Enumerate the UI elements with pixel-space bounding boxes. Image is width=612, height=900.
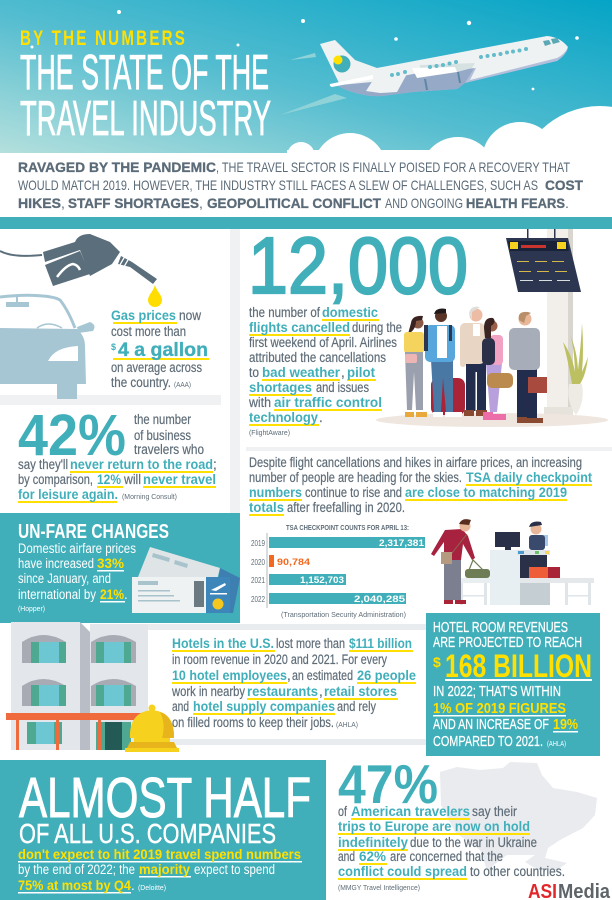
bar chart: TSA checkpoint counts: 2,040,285 xyxy=(354,594,405,604)
illustration: hotel building and bell xyxy=(6,622,150,750)
bar chart: TSA checkpoint counts: 1,152,703 xyxy=(300,575,344,585)
header sky banner xyxy=(0,0,612,274)
plant xyxy=(563,323,588,415)
hotel text: on filled rooms to keep their jobs. xyxy=(172,715,334,730)
TSA intro text: after freefalling in 2020. xyxy=(287,500,405,515)
TSA intro text: totals xyxy=(249,500,284,515)
bar chart: TSA checkpoint counts: (Transportation Security Administration) xyxy=(281,612,406,619)
icon: car xyxy=(0,295,94,399)
panel: almost half of companies: 75% at most by Q4 xyxy=(18,878,131,893)
title: TRAVEL INDUSTRY xyxy=(20,92,271,146)
cancelled flights text: and issues xyxy=(316,380,369,395)
intro text: HIKES xyxy=(18,195,61,211)
icon: gas pump nozzle xyxy=(0,234,157,286)
bar chart: TSA checkpoint counts: 90,784 xyxy=(277,557,310,567)
gas prices text: 4 a gallon xyxy=(118,340,208,361)
illustration: travelers at departures board xyxy=(376,229,608,427)
bar chart: TSA checkpoint counts: 2019 xyxy=(251,539,265,548)
cancelled flights text: with xyxy=(248,395,271,410)
stat: 47 percent American travelers: to other countries. xyxy=(470,864,565,879)
un-fare body text: 21% xyxy=(100,587,124,602)
intro text: COST xyxy=(545,177,583,193)
stat: 42 percent business travelers: the number xyxy=(134,412,191,427)
cancelled flights text xyxy=(248,305,402,437)
intro text: , xyxy=(61,195,65,211)
cancelled flights text: air traffic control xyxy=(274,395,382,410)
cancelled flights text: to xyxy=(249,365,259,380)
bar chart: TSA checkpoint counts: 2020 xyxy=(251,558,265,567)
TSA intro text: continue to rise and xyxy=(305,485,402,500)
illustration: airplane xyxy=(280,36,568,115)
panel: almost half of companies: (Deloitte) xyxy=(138,885,166,892)
title xyxy=(20,46,271,146)
un-fare body text: . xyxy=(124,587,128,602)
panel: hotel room revenues: $ xyxy=(433,654,441,670)
un-fare body text: 33% xyxy=(97,556,124,571)
hotel text: $111 billion xyxy=(349,636,412,651)
stat: 42 percent business travelers: (Morning Consult) xyxy=(122,494,177,501)
stat: 12,000: 12,000 xyxy=(248,221,468,310)
TSA intro text xyxy=(249,455,592,516)
gas prices text: (AAA) xyxy=(174,382,191,389)
panel: almost half of companies: . xyxy=(131,878,135,893)
cancelled flights text: domestic xyxy=(322,305,378,320)
illustration: airport security checkpoint xyxy=(431,519,594,605)
stat: 47 percent American travelers: 47% xyxy=(338,753,438,815)
un-fare body text: international by xyxy=(18,587,96,602)
intro text: STAFF SHORTAGES xyxy=(68,195,199,211)
panel: almost half of companies xyxy=(0,760,326,900)
un-fare body text: have increased xyxy=(18,556,94,571)
person: man in gray blazer xyxy=(509,312,547,423)
hotel text: Hotels in the U.S. xyxy=(172,636,274,651)
panel: hotel room revenues: COMPARED TO 2021. xyxy=(433,733,543,750)
cancelled flights text: bad weather xyxy=(262,365,341,380)
person: woman in pink with backpack xyxy=(482,318,513,420)
hotel text: 26 people xyxy=(357,668,416,683)
stat: 42 percent business travelers xyxy=(18,403,217,503)
icon: service bell xyxy=(125,704,179,752)
gas prices text: $ xyxy=(111,342,116,352)
cancelled flights text: during the xyxy=(352,320,402,335)
hotel text: and xyxy=(172,699,189,714)
panel: hotel room revenues: 1% OF 2019 FIGURES xyxy=(433,700,566,717)
hotel text: in room revenue in 2020 and 2021. For every xyxy=(172,652,387,667)
intro text: GEOPOLITICAL CONFLICT xyxy=(207,195,381,211)
gas prices text xyxy=(111,308,209,390)
cancelled flights text: , xyxy=(341,365,345,380)
cancelled flights text: (FlightAware) xyxy=(249,430,290,437)
panel: almost half of companies: don't expect to hit 2019 travel spend numbers xyxy=(18,847,301,862)
un-fare body text: Domestic airfare prices xyxy=(18,541,136,556)
hotel text: retail stores xyxy=(324,684,397,699)
un-fare body text: since January, and xyxy=(18,571,111,586)
icon: plane tickets xyxy=(132,547,240,613)
hotel text: lost more than xyxy=(276,636,345,651)
TSA intro text: number of people are heading for the skies. xyxy=(249,470,462,485)
stat: 47 percent American travelers: indefinitely xyxy=(338,835,408,850)
person: man in blue jacket xyxy=(424,309,465,417)
stat: 42 percent business travelers: 42% xyxy=(18,403,126,468)
stat: 47 percent American travelers: 62% xyxy=(359,849,386,864)
TSA intro text: numbers xyxy=(249,485,302,500)
hotel text: an estimated xyxy=(292,668,353,683)
hotel text: hotel supply companies xyxy=(193,699,335,714)
title: THE STATE OF THE xyxy=(20,46,269,100)
cancelled flights text: the number of xyxy=(249,305,320,320)
stat: 42 percent business travelers: by comparison, xyxy=(18,472,93,487)
panel: almost half of companies: by the end of 2022; the xyxy=(18,862,135,877)
cancelled flights text: pilot xyxy=(347,365,375,380)
un-fare body text xyxy=(18,541,136,613)
stat: 42 percent business travelers: 12% xyxy=(97,472,121,487)
stat: 47 percent American travelers: say their xyxy=(472,804,517,819)
TSA intro text: TSA daily checkpoint xyxy=(466,470,592,485)
stat: 47 percent American travelers: are concerned that the xyxy=(390,849,503,864)
teal divider band xyxy=(0,217,612,229)
stat: 42 percent business travelers: of business xyxy=(134,428,191,443)
hotel text: restaurants xyxy=(247,684,318,699)
panel: hotel room revenues: AND AN INCREASE OF xyxy=(433,716,549,733)
stat: 47 percent American travelers: conflict could spread xyxy=(338,864,467,879)
hotel text: , xyxy=(287,668,291,683)
hotel text: , xyxy=(319,684,323,699)
cancelled flights text: . xyxy=(319,410,323,425)
logo: ASI Media xyxy=(528,881,611,900)
bar chart: TSA checkpoint counts: 2021 xyxy=(251,576,265,585)
panel: hotel room revenues xyxy=(426,613,600,756)
stat: 42 percent business travelers: say they'll xyxy=(18,457,68,472)
hotel text xyxy=(171,636,416,730)
person: older man in beige jacket xyxy=(460,307,487,416)
bar chart: TSA checkpoint counts: 2,317,381 xyxy=(379,538,424,548)
gas prices text: Gas prices xyxy=(111,308,176,323)
heading: un-fare changes: UN-FARE CHANGES xyxy=(18,521,169,543)
icon: fuel drop xyxy=(148,285,162,307)
panel: hotel room revenues: 19% xyxy=(553,716,578,733)
cancelled flights text: shortages xyxy=(249,380,312,395)
hotel text: and rely xyxy=(337,699,376,714)
panel: almost half of companies: OF ALL U.S. COMPANIES xyxy=(19,818,276,849)
stat: 47 percent American travelers: (MMGY Travel Intelligence) xyxy=(338,885,420,892)
stat: 42 percent business travelers: will xyxy=(123,472,141,487)
map: Ukraine silhouette xyxy=(440,762,597,870)
intro text xyxy=(18,159,583,211)
panel: hotel room revenues: (AHLA) xyxy=(547,741,566,748)
cancelled flights text: attributed the cancellations xyxy=(249,350,386,365)
gray hotel bands xyxy=(125,624,426,630)
intro text: HEALTH FEARS xyxy=(466,195,565,211)
hotel text: (AHLA) xyxy=(336,722,358,729)
stat: 42 percent business travelers: ; xyxy=(213,457,217,472)
stat: 47 percent American travelers: and xyxy=(338,849,355,864)
panel: almost half of companies: ALMOST HALF xyxy=(19,766,311,830)
bar chart: TSA checkpoint counts: 2022 xyxy=(251,595,265,604)
bar chart: TSA checkpoint counts xyxy=(251,525,425,619)
gas prices text: now xyxy=(179,308,201,323)
gas prices text: on average across xyxy=(111,360,202,375)
intro text: , xyxy=(199,195,203,211)
intro text: . xyxy=(565,195,569,211)
stat: 42 percent business travelers: never travel xyxy=(143,472,216,487)
stat: 47 percent American travelers: trips to Europe are now on hold xyxy=(338,819,530,834)
hotel text: 10 hotel employees xyxy=(172,668,287,683)
cancelled flights text: flights cancelled xyxy=(249,320,350,335)
panel: hotel room revenues: IN 2022; THAT'S WITHIN xyxy=(433,683,561,700)
bar chart: TSA checkpoint counts: TSA CHECKPOINT COUNTS FOR APRIL 13: xyxy=(286,525,409,532)
kicker: by the numbers: BY THE NUMBERS xyxy=(20,25,185,50)
intro text: RAVAGED BY THE PANDEMIC xyxy=(18,159,216,175)
stat: 42 percent business travelers: for leisure again. xyxy=(18,487,118,502)
gas prices text: the country. xyxy=(111,375,171,390)
stat: 47 percent American travelers: American travelers xyxy=(351,804,470,819)
cancelled flights text: technology xyxy=(249,410,318,425)
un-fare body text: (Hopper) xyxy=(18,606,45,613)
stat: 47 percent American travelers xyxy=(338,753,565,892)
stat: 42 percent business travelers: never return to the road xyxy=(70,457,213,472)
person: woman in yellow xyxy=(404,316,427,417)
gas prices text: cost more than xyxy=(111,324,186,339)
panel: almost half of companies: majority xyxy=(139,862,190,877)
panel: almost half of companies: expect to spend xyxy=(194,862,275,877)
cancelled flights text: first weekend of April. Airlines xyxy=(249,335,397,350)
stat: 42 percent business travelers: travelers who xyxy=(134,442,204,457)
TSA intro text: are close to matching 2019 xyxy=(405,485,567,500)
panel: un-fare changes xyxy=(0,513,240,623)
hotel text: work in nearby xyxy=(171,684,245,699)
stat: 47 percent American travelers: due to the war in Ukraine xyxy=(410,835,537,850)
stat: 47 percent American travelers: of xyxy=(338,804,347,819)
intro text: AND ONGOING xyxy=(385,195,463,211)
